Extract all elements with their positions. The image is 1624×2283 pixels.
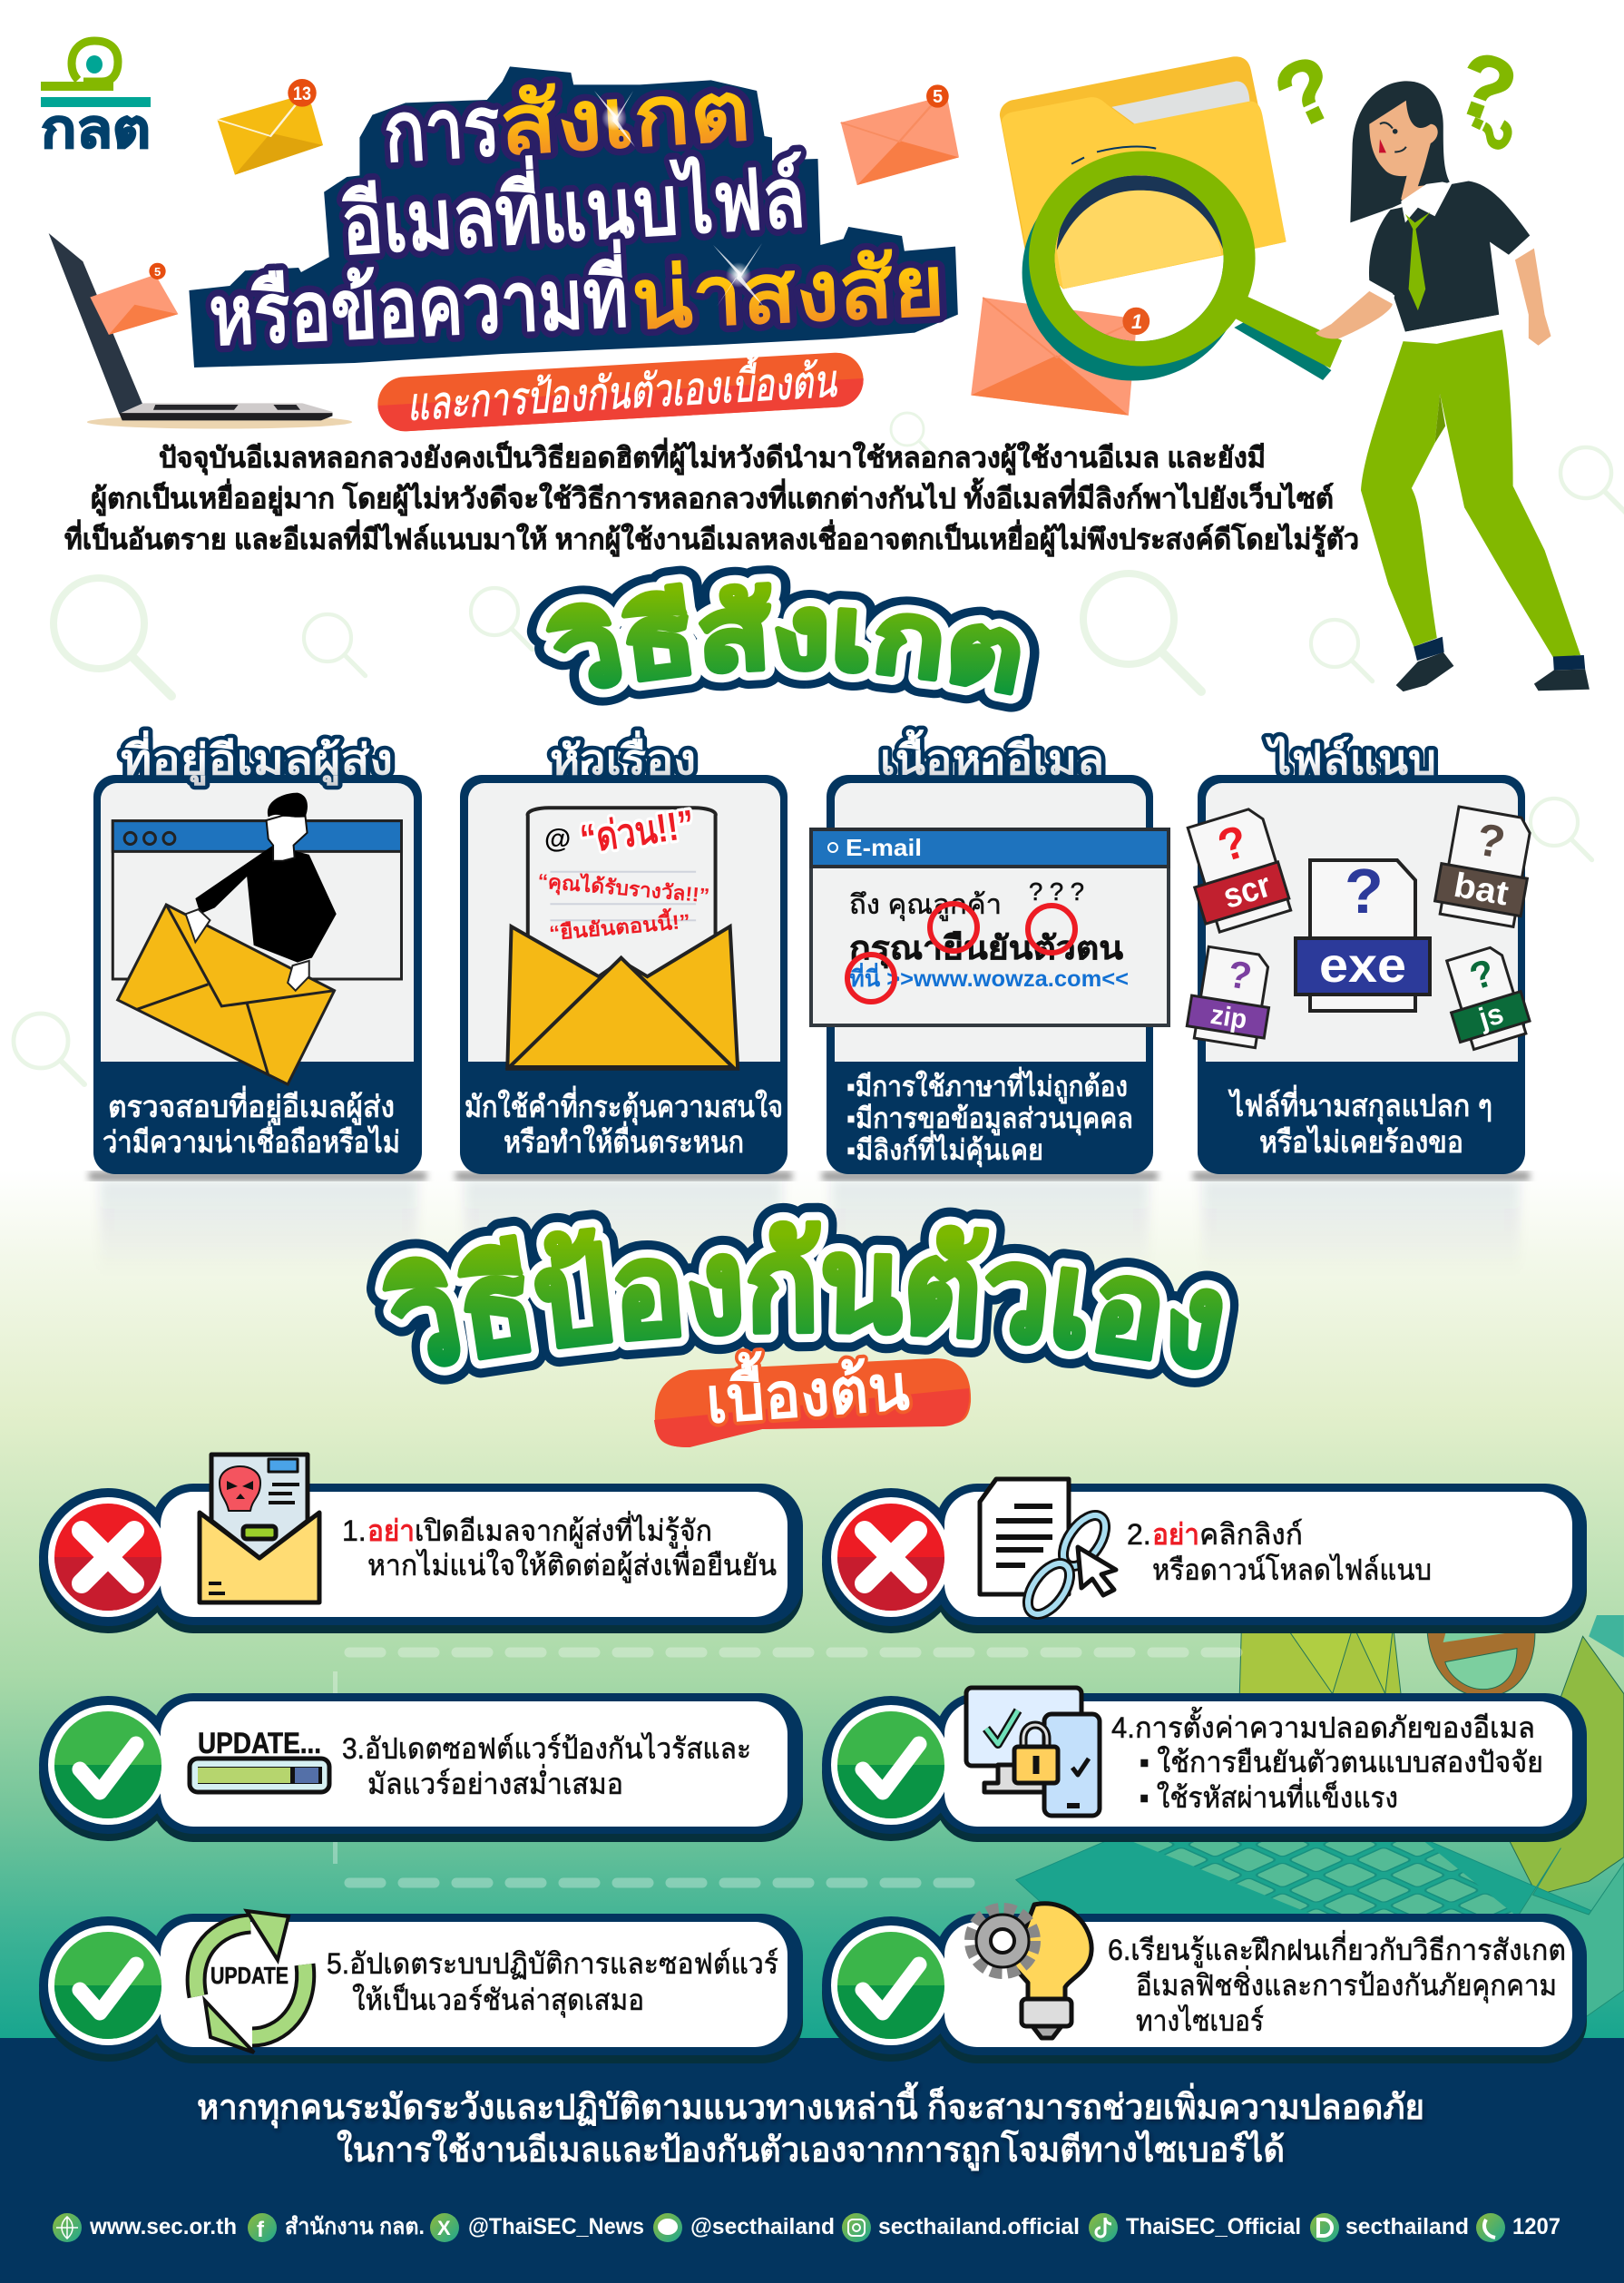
row 2 left: update antivirus: มัลแวร์อย่างสม่ำเสมอ <box>367 1764 623 1800</box>
icon: question marks: ? <box>1455 103 1526 160</box>
logo <box>41 41 151 159</box>
icon: update progress bar <box>190 1727 329 1792</box>
closing message: หากทุกคนระมัดระวังและปฏิบัติตามแนวทางเหล่านี้ ก็จะสามารถช่วยเพิ่มความปลอดภัย <box>197 2082 1424 2129</box>
card: subject: “ยืนยันตอนนี้!” <box>548 906 691 945</box>
row 3 left: update operating system: 5.อัปเดตระบบปฏิบัติการและซอฟต์แวร์ <box>327 1947 778 1980</box>
title: หรือข้อความที่ <box>207 238 630 363</box>
row 1 left: do not open: เปิดอีเมลจากผู้ส่งที่ไม่รู้จัก <box>415 1511 712 1549</box>
card: subject: “คุณได้รับรางวัล!!” <box>536 868 710 909</box>
card: sender address: ว่ามีความน่าเชื่อถือหรือไม่ <box>103 1121 400 1159</box>
icon: X: X <box>437 2217 451 2239</box>
icon: bat file: ? <box>1472 813 1509 868</box>
icon: email window <box>811 829 1169 1025</box>
row 1 left: do not open: 1. <box>342 1514 367 1547</box>
card: email content: ▪มีการขอข้อมูลส่วนบุคคล <box>846 1102 1133 1136</box>
background: green folder and laptop illustration <box>1016 1615 1624 2021</box>
card: attachment: ไฟล์ที่นามสกุลแปลก ๆ <box>1228 1084 1492 1125</box>
icon: js file <box>1436 943 1533 1053</box>
heading: how to observe: วิธีสังเกต <box>536 573 1031 704</box>
icon: instagram <box>842 2213 871 2242</box>
contact bar: @secthailand <box>690 2214 835 2239</box>
icon: scr file: ? <box>1212 815 1253 872</box>
icon: red cross <box>837 1504 944 1611</box>
row 1 left: do not open: อย่า <box>367 1514 415 1547</box>
icon: website <box>53 2213 82 2242</box>
row 1 left: do not open <box>39 1455 803 1633</box>
icon: update arrows <box>196 1911 306 2053</box>
contact bar: ThaiSEC_Official <box>1126 2214 1301 2239</box>
contact bar: secthailand <box>1345 2214 1469 2239</box>
row 1 right: do not click: คลิกลิงก์ <box>1199 1518 1303 1551</box>
icon: zip file: zip <box>1208 1000 1249 1035</box>
icon: email window: ? ? ? <box>1029 877 1084 906</box>
footer band <box>0 2038 1624 2283</box>
intro paragraph <box>64 437 1359 557</box>
card titles: หัวเรื่อง <box>550 730 696 783</box>
closing message: ในการใช้งานอีเมลและป้องกันตัวเองจากการถูกโจมตีทางไซเบอร์ได้ <box>337 2129 1285 2171</box>
card: email content: ▪มีการใช้ภาษาที่ไม่ถูกต้อง <box>846 1066 1128 1104</box>
row 1 right: do not click <box>822 1479 1587 1633</box>
icon: orange envelope 5: 5 <box>933 87 943 107</box>
heading: how to protect yourself: วิธีป้องกันตัวเอง <box>375 1212 1230 1378</box>
row 1 right: do not click: 2. <box>1127 1518 1151 1551</box>
row 1 left: do not open: หากไม่แน่ใจให้ติดต่อผู้ส่งเพื่อยืนยัน <box>367 1545 777 1583</box>
icon: question marks: ? <box>1260 35 1352 149</box>
icon: document with broken link <box>980 1479 1116 1622</box>
row 3 left: update operating system <box>39 1911 803 2063</box>
icon: scr file: scr <box>1219 867 1276 916</box>
icon: bat file <box>1433 806 1538 927</box>
intro paragraph: ปัจจุบันอีเมลหลอกลวงยังคงเป็นวิธียอดฮิตที่ผู้ไม่หวังดีนำมาใช้หลอกลวงผู้ใช้งานอีเมล และยังมี <box>159 437 1266 475</box>
icon: update arrows: UPDATE <box>210 1962 289 1989</box>
row 3 right: learn and practice: 6.เรียนรู้และฝึกฝนเกี่ยวกับวิธีการสังเกต <box>1108 1930 1566 1968</box>
icon: X <box>430 2213 459 2242</box>
card titles: ไฟล์แนบ <box>1265 736 1436 783</box>
title: การ <box>381 80 503 180</box>
card: subject: “ด่วน!!” <box>578 802 697 862</box>
icon: browser window, man and envelope <box>113 793 401 1084</box>
background dashed lines <box>333 1652 1257 1883</box>
icon: orange envelope 5 <box>841 84 959 185</box>
row 3 right: learn and practice: ทางไซเบอร์ <box>1136 2004 1264 2037</box>
reflections under cards <box>89 1171 1530 1275</box>
row 2 right: email security settings: 4.การตั้งค่าความปลอดภัยของอีเมล <box>1111 1707 1535 1744</box>
illustration: confused woman <box>1316 81 1590 691</box>
heading: how to protect yourself: วิธีป้องกันตัวเอง <box>383 1220 1223 1370</box>
icon: gear and light bulb <box>970 1904 1091 2038</box>
card: sender address <box>93 775 422 1174</box>
contact bar: secthailand.official <box>878 2214 1080 2239</box>
icon: green check <box>54 1711 161 1818</box>
icon: open laptop with envelope <box>49 233 352 429</box>
icon: LINE <box>653 2213 682 2242</box>
icon: tiktok <box>1089 2213 1118 2242</box>
logo: กลต <box>41 100 151 159</box>
icon: dime <box>1310 2213 1339 2242</box>
heading: how to observe: วิธีสังเกต <box>526 565 1040 712</box>
icon: update progress bar: UPDATE... <box>198 1727 321 1759</box>
icon: green check <box>54 1932 161 2039</box>
icon: email window: กรุณายืนยันตัวตน <box>849 929 1123 969</box>
illustration: folder, envelope and magnifier: 1 <box>1131 310 1142 333</box>
icon: yellow envelope 13 <box>217 79 323 175</box>
card: email content <box>811 775 1169 1174</box>
title: น่าสงสัย <box>630 240 947 347</box>
icon: devices with padlock <box>966 1688 1100 1816</box>
card: subject: มักใช้คำที่กระตุ้นความสนใจ <box>465 1085 783 1126</box>
card: subject: @ <box>544 824 571 854</box>
contact bar <box>53 2213 1560 2242</box>
card titles: ที่อยู่อีเมลผู้ส่ง <box>121 730 393 786</box>
card: email content: ▪มีลิงก์ที่ไม่คุ้นเคย <box>846 1130 1043 1168</box>
contact bar: สำนักงาน กลต. <box>285 2214 425 2239</box>
contact bar: 1207 <box>1512 2214 1560 2239</box>
icon: envelope with skull letter <box>200 1455 319 1602</box>
icon: yellow envelope 13: 13 <box>293 83 311 104</box>
icon: question marks: ? <box>1443 31 1529 143</box>
subtitle pill: และการป้องกันตัวเองเบื้องต้น <box>405 348 839 430</box>
icon: email window: ที่นี่ >>www.wowza.com<< <box>849 963 1129 992</box>
background gradient <box>0 1171 1624 2042</box>
intro paragraph: ผู้ตกเป็นเหยื่ออยู่มาก โดยผู้ไม่หวังดีจะใช้วิธีการหลอกลวงที่แตกต่างกันไป ทั้งอีเมลที่มีลิงก์พาไปยังเว็บไซต์ <box>91 477 1334 516</box>
row 2 left: update antivirus <box>39 1693 803 1842</box>
row 1 right: do not click: หรือดาวน์โหลดไฟล์แนบ <box>1152 1553 1432 1586</box>
icon: zip file <box>1185 946 1277 1049</box>
row 3 right: learn and practice: อีเมลฟิชชิ่งและการป้องกันภัยคุกคาม <box>1136 1965 1557 2004</box>
badge: basics: เบื้องต้น <box>703 1340 912 1436</box>
card: attachment: หรือไม่เคยร้องขอ <box>1259 1124 1463 1159</box>
card: attachment <box>1178 775 1538 1174</box>
card: sender address: ตรวจสอบที่อยู่อีเมลผู้ส่ง <box>108 1085 395 1126</box>
card: subject: หรือทำให้ตื่นตระหนก <box>504 1121 744 1159</box>
icon: js file: js <box>1474 996 1507 1035</box>
icon: green check <box>837 1711 944 1818</box>
row 3 left: update operating system: ให้เป็นเวอร์ชันล่าสุดเสมอ <box>352 1983 644 2018</box>
contact bar: @ThaiSEC_News <box>468 2214 644 2239</box>
illustration: folder, envelope and magnifier <box>971 56 1342 416</box>
card titles: เนื้อหาอีเมล <box>880 729 1104 783</box>
icon: facebook: f <box>257 2218 265 2242</box>
contact bar: www.sec.or.th <box>89 2214 237 2239</box>
row 1 right: do not click: อย่า <box>1152 1518 1199 1551</box>
icon: green check <box>837 1932 944 2039</box>
icon: zip file: ? <box>1225 952 1255 998</box>
icon: exe file <box>1296 856 1430 1011</box>
icon: phone <box>1476 2213 1505 2242</box>
title: อีเมลที่แนบไฟล์ <box>338 138 807 272</box>
row 2 left: update antivirus: 3.อัปเดตซอฟต์แวร์ป้องกันไวรัสและ <box>342 1732 751 1765</box>
title backdrop <box>189 66 958 367</box>
row 2 right: email security settings: ▪ ใช้การยืนยันตัวตนแบบสองปัจจัย <box>1140 1746 1543 1778</box>
row 3 right: learn and practice <box>822 1904 1587 2063</box>
row 2 right: email security settings <box>822 1688 1587 1842</box>
icon: question marks <box>1260 31 1529 160</box>
icon: email window: E-mail <box>846 834 922 861</box>
row 2 right: email security settings: ▪ ใช้รหัสผ่านที่แข็งแรง <box>1140 1778 1398 1814</box>
icon: exe file: exe <box>1319 938 1406 993</box>
heading: how to observe: วิธีสังเกต <box>546 582 1021 695</box>
icon: letter and open envelope <box>507 808 738 1069</box>
closing message <box>197 2082 1424 2171</box>
icon: email window: ถึง คุณลูกค้า <box>849 890 1002 922</box>
icon: red cross <box>54 1504 161 1611</box>
icon: exe file: ? <box>1345 856 1384 926</box>
icon: scr file <box>1178 806 1293 936</box>
icon: js file: ? <box>1464 951 1500 998</box>
icon: open laptop with envelope: 5 <box>154 265 161 279</box>
card: subject <box>460 775 788 1174</box>
heading: how to protect yourself: วิธีป้องกันตัวเอง <box>367 1203 1239 1387</box>
title: สังเกต <box>497 64 753 172</box>
intro paragraph: ที่เป็นอันตราย และอีเมลที่มีไฟล์แนบมาให้ หากผู้ใช้งานอีเมลหลงเชื่ออาจตกเป็นเหยื่อผู้ไม่พึงประสงค์ดีโดยไม่รู้ตัว <box>64 519 1359 557</box>
badge: basics <box>654 1340 971 1447</box>
icon: bat file: bat <box>1451 867 1511 914</box>
card titles <box>121 729 1436 786</box>
faint magnifier pattern <box>14 413 1624 1084</box>
icon: facebook <box>248 2213 277 2242</box>
title <box>207 64 947 363</box>
